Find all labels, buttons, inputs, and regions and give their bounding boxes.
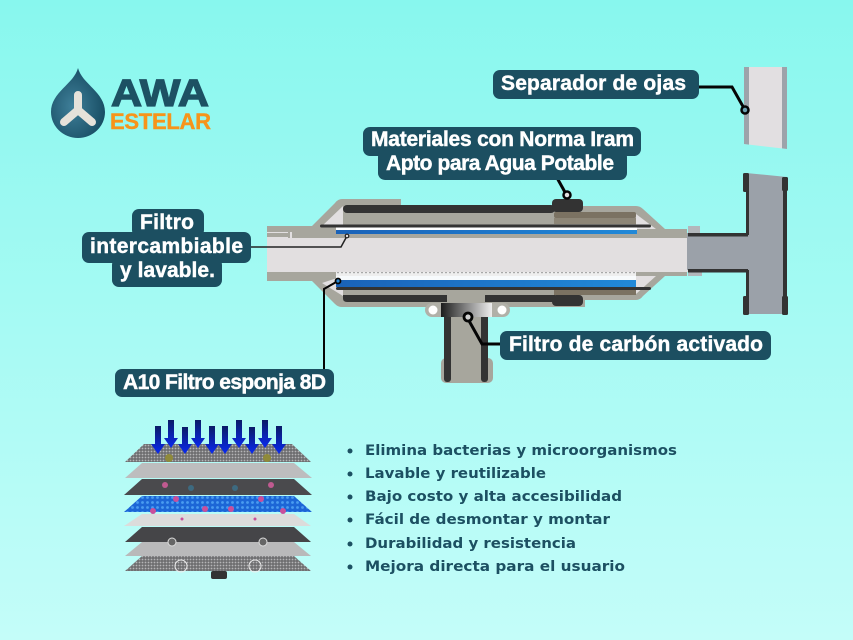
layer: dark lower (125, 527, 311, 542)
bullet: lavable: Lavable y reutilizable (365, 466, 546, 482)
callout: Filtro intercambiable y lavable: Filtro (140, 211, 194, 234)
leader line: carbón (464, 313, 502, 344)
flow arrows (151, 420, 286, 454)
layer: white (124, 514, 311, 526)
leader line: materiales (556, 176, 570, 198)
bottom filter layer (336, 272, 636, 287)
callout: Materiales con Norma Iram (363, 127, 641, 180)
dark rails (320, 199, 651, 306)
neck inserts (267, 232, 292, 238)
central tube (267, 238, 688, 272)
inner chamber left (322, 206, 343, 296)
layer: light grey lower (125, 542, 311, 556)
icon: water drop (51, 68, 105, 138)
eye separator part (744, 67, 787, 149)
callout: Filtro de carbón activado: Filtro de carbón activado (509, 333, 763, 356)
bullet: desmontar: Fácil de desmontar y montar (365, 512, 611, 528)
leader line: separador (699, 87, 748, 114)
callout: Materiales con Norma Iram: Apto para Agua Potable (386, 152, 614, 175)
inner chamber right (636, 214, 656, 294)
callout: Materiales con Norma Iram: Materiales con Norma Iram (371, 128, 634, 151)
outer shell (267, 199, 687, 307)
lower inlet branch (441, 295, 493, 383)
layer: mesh top (125, 444, 311, 462)
top filter layer (336, 227, 637, 234)
leader line: filtro intercambiable (250, 234, 349, 247)
filter layers diagram (124, 420, 312, 579)
layer: dark upper (124, 479, 312, 495)
callout: Filtro intercambiable y lavable: intercambiable (90, 235, 243, 258)
T outlet (687, 173, 787, 314)
callout: Separador de ojas: Separador de ojas (501, 72, 686, 95)
logo wordmark AWA: AWA (111, 73, 209, 115)
leader line: esponja (324, 278, 340, 370)
bullet: usuario: Mejora directa para el usuario (365, 559, 625, 575)
outlet nubs (688, 226, 702, 276)
callout: Filtro intercambiable y lavable (82, 209, 251, 287)
logo wordmark ESTELAR: ESTELAR (110, 109, 211, 134)
benefits list (348, 443, 677, 575)
bullet: bajo costo: Bajo costo y alta accesibilidad (365, 489, 622, 505)
layer: mesh bottom (125, 556, 311, 571)
callout: Filtro intercambiable y lavable: y lavable. (120, 259, 215, 282)
filter housing cross-section (267, 173, 788, 383)
brown seals (554, 212, 636, 295)
callout: A10 Filtro esponja 8D: A10 Filtro esponja 8D (123, 371, 326, 394)
bullet: elimina: Elimina bacterias y microorganismos (365, 443, 677, 459)
activated carbon clamp (425, 303, 510, 317)
logo: AWA Estelar (51, 68, 211, 138)
layer: light grey upper (125, 463, 312, 478)
particles (150, 454, 286, 579)
bullet: durabilidad: Durabilidad y resistencia (365, 536, 576, 552)
layer: blue foam (124, 496, 312, 512)
outlet outline (688, 173, 788, 315)
